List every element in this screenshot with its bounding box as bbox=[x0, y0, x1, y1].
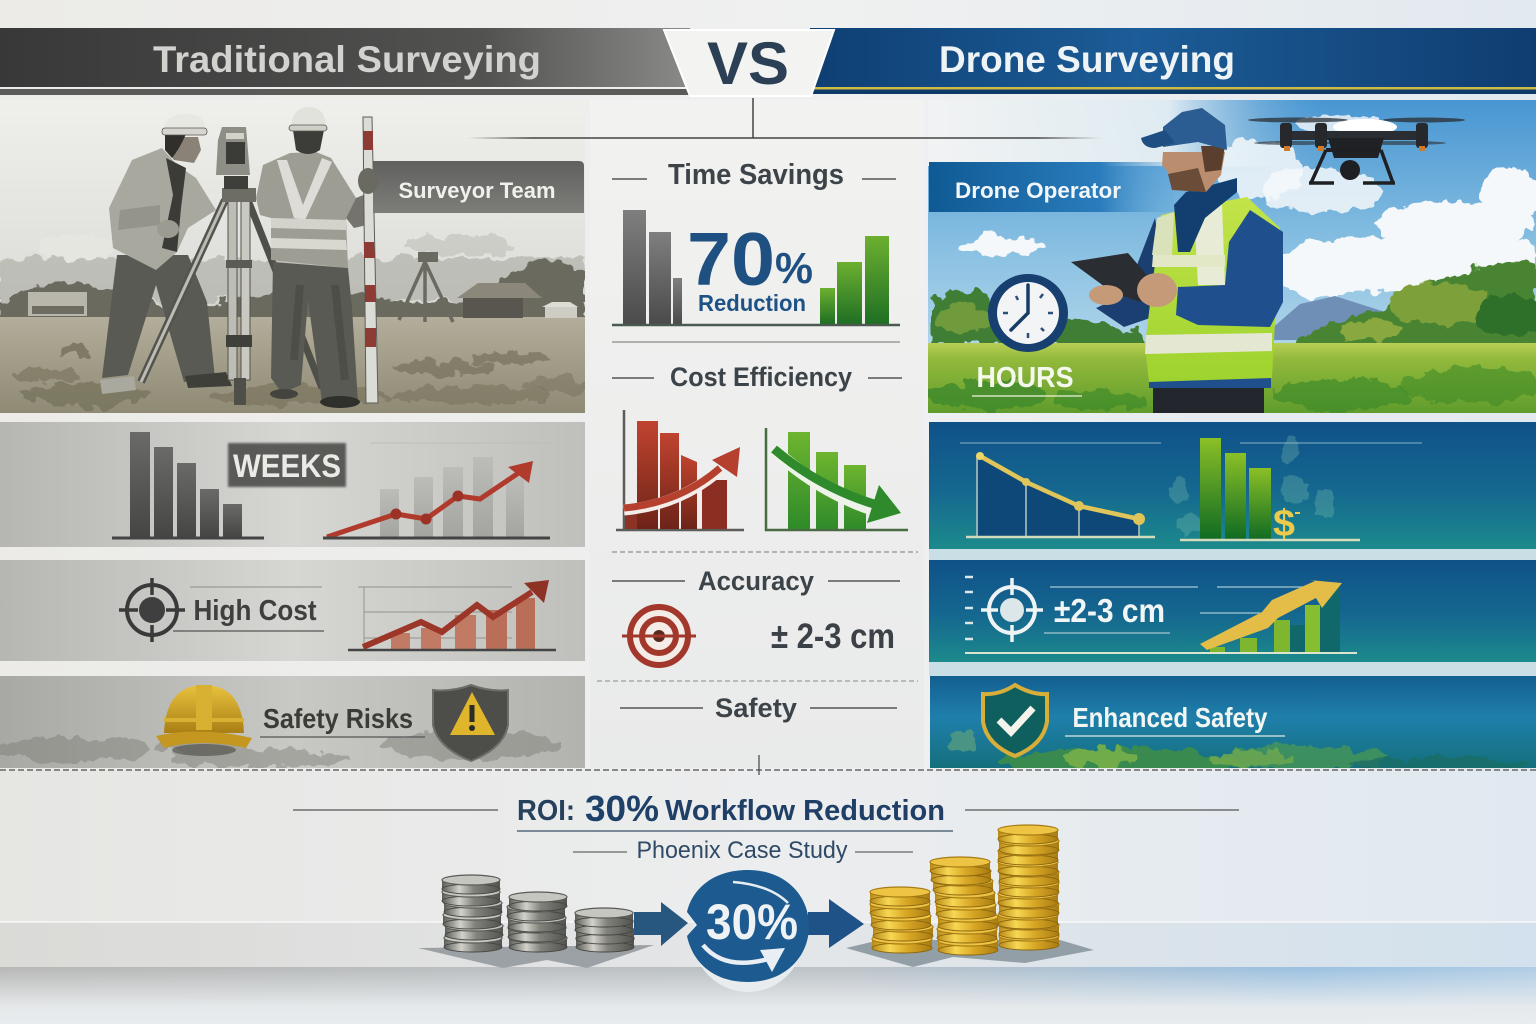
chart: falling cost bbox=[766, 428, 908, 530]
icon: shield check bbox=[983, 685, 1047, 756]
panel: accuracy row bbox=[929, 560, 1536, 662]
icon: crosshair bbox=[981, 578, 1043, 642]
icon: gold coin stacks bbox=[870, 825, 1059, 955]
heading: cost efficiency: Cost Efficiency bbox=[670, 362, 852, 392]
label: hours: HOURS bbox=[976, 362, 1074, 394]
arrow: into badge bbox=[634, 902, 688, 946]
surveyor right with reflective vest bbox=[256, 107, 371, 408]
heading: drone surveying: Drone Surveying bbox=[939, 39, 1235, 80]
tablet bbox=[1071, 253, 1151, 302]
panel: weeks timeline row bbox=[0, 422, 585, 547]
heading: drone surveying bbox=[810, 28, 1536, 94]
safety vest bbox=[1145, 197, 1280, 382]
ground shadow left bbox=[418, 945, 654, 968]
label: weeks: WEEKS bbox=[233, 448, 341, 484]
chart: grey bars bbox=[623, 210, 682, 324]
tripod rear leg bbox=[250, 202, 320, 390]
foliage bbox=[947, 729, 1531, 768]
stat: 70% reduction bbox=[687, 217, 813, 316]
panel: surveyor team photo bbox=[0, 100, 585, 413]
ground patches bbox=[10, 346, 585, 407]
panel: enhanced safety row bbox=[930, 676, 1536, 776]
icon: crosshair bbox=[119, 578, 185, 642]
vs badge bbox=[664, 30, 834, 97]
vs badge: VS bbox=[707, 30, 789, 97]
chart: green bars bbox=[820, 236, 889, 324]
stat: 70% reduction: Reduction bbox=[698, 290, 806, 316]
panel: high cost row bbox=[0, 560, 585, 661]
chart: rising cost bbox=[616, 410, 744, 530]
tree lines bbox=[931, 260, 1536, 350]
chart: rising line over bars bbox=[323, 457, 550, 538]
stat: 70% reduction: 70 bbox=[687, 217, 775, 301]
background house bbox=[457, 283, 578, 318]
heading: time savings: Time Savings bbox=[668, 159, 844, 191]
heading: roi: 30% bbox=[585, 788, 659, 829]
label: safety risks: Safety Risks bbox=[263, 703, 413, 734]
chart: declining time curve bbox=[966, 452, 1155, 537]
ground shadow right bbox=[846, 940, 1094, 967]
heading: accuracy: Accuracy bbox=[698, 566, 814, 596]
badge: 30 percent bbox=[687, 870, 809, 992]
chart: falling green bars with dollar: $ bbox=[1273, 503, 1295, 545]
stat: 70% reduction: % bbox=[775, 244, 813, 293]
heading: traditional surveying bbox=[0, 28, 690, 95]
badge: 30 percent: 30% bbox=[706, 894, 798, 950]
right row gaps bbox=[929, 549, 1536, 676]
center connector line bbox=[468, 137, 1100, 139]
distant clouds bbox=[0, 235, 585, 300]
heading: traditional surveying: Traditional Surveying bbox=[153, 39, 541, 80]
label: surveyor team bbox=[373, 161, 584, 213]
drone bbox=[1248, 118, 1465, 183]
icon: target bbox=[622, 607, 696, 665]
connector stem bbox=[752, 98, 754, 138]
chart: high cost trend bbox=[348, 580, 556, 650]
arrow: out of badge bbox=[808, 899, 864, 948]
tripod and total station bbox=[141, 127, 256, 405]
label: drone operator: Drone Operator bbox=[955, 178, 1121, 203]
icon: grey coin stacks bbox=[442, 875, 634, 952]
distant tree line bbox=[0, 261, 585, 322]
subheading: case study: Phoenix Case Study bbox=[636, 837, 848, 864]
surveyor hand on rod bbox=[358, 168, 378, 194]
background tripod bbox=[399, 252, 453, 322]
surveyor left bbox=[100, 114, 232, 394]
label: high cost: High Cost bbox=[194, 595, 317, 627]
label: surveyor team: Surveyor Team bbox=[398, 178, 556, 203]
section: accuracy bbox=[597, 566, 918, 681]
distant mountain bbox=[1270, 296, 1385, 340]
stat: accuracy value: ± 2-3 cm bbox=[771, 617, 895, 656]
mottled ground bbox=[0, 731, 560, 767]
header: comparison title band bbox=[0, 28, 1536, 97]
panel: safety risks row bbox=[0, 676, 585, 768]
panel: roi footer bbox=[0, 755, 1536, 1024]
section: safety: Safety bbox=[715, 693, 797, 723]
clouds bbox=[956, 115, 1536, 298]
label: enhanced safety: Enhanced Safety bbox=[1072, 702, 1268, 733]
icon: warning shield bbox=[433, 685, 508, 761]
icon: hard hat bbox=[156, 685, 252, 756]
icon: clock bbox=[988, 274, 1068, 352]
levelling rod bbox=[363, 117, 378, 403]
label: drone operator bbox=[929, 162, 1174, 212]
grass patches bbox=[925, 367, 1536, 411]
section: cost efficiency bbox=[612, 362, 918, 552]
operator bbox=[1071, 108, 1283, 413]
chart: declining grey bars bbox=[112, 432, 264, 538]
stat: drone accuracy: ±2-3 cm bbox=[1054, 592, 1165, 629]
panel: cost decline row bbox=[929, 422, 1536, 549]
panel: drone operator photo bbox=[925, 100, 1536, 413]
background building bbox=[28, 292, 87, 316]
panel: center metrics column bbox=[590, 100, 924, 768]
heading: roi: Workflow Reduction bbox=[665, 795, 945, 827]
heading: roi bbox=[293, 788, 1239, 831]
pale leaf shapes bbox=[1172, 438, 1335, 535]
chart: accuracy trend bbox=[965, 580, 1357, 653]
heading: roi: ROI: bbox=[517, 795, 575, 827]
section: time savings bbox=[612, 159, 900, 342]
chart: falling green bars with dollar bbox=[1180, 438, 1360, 545]
